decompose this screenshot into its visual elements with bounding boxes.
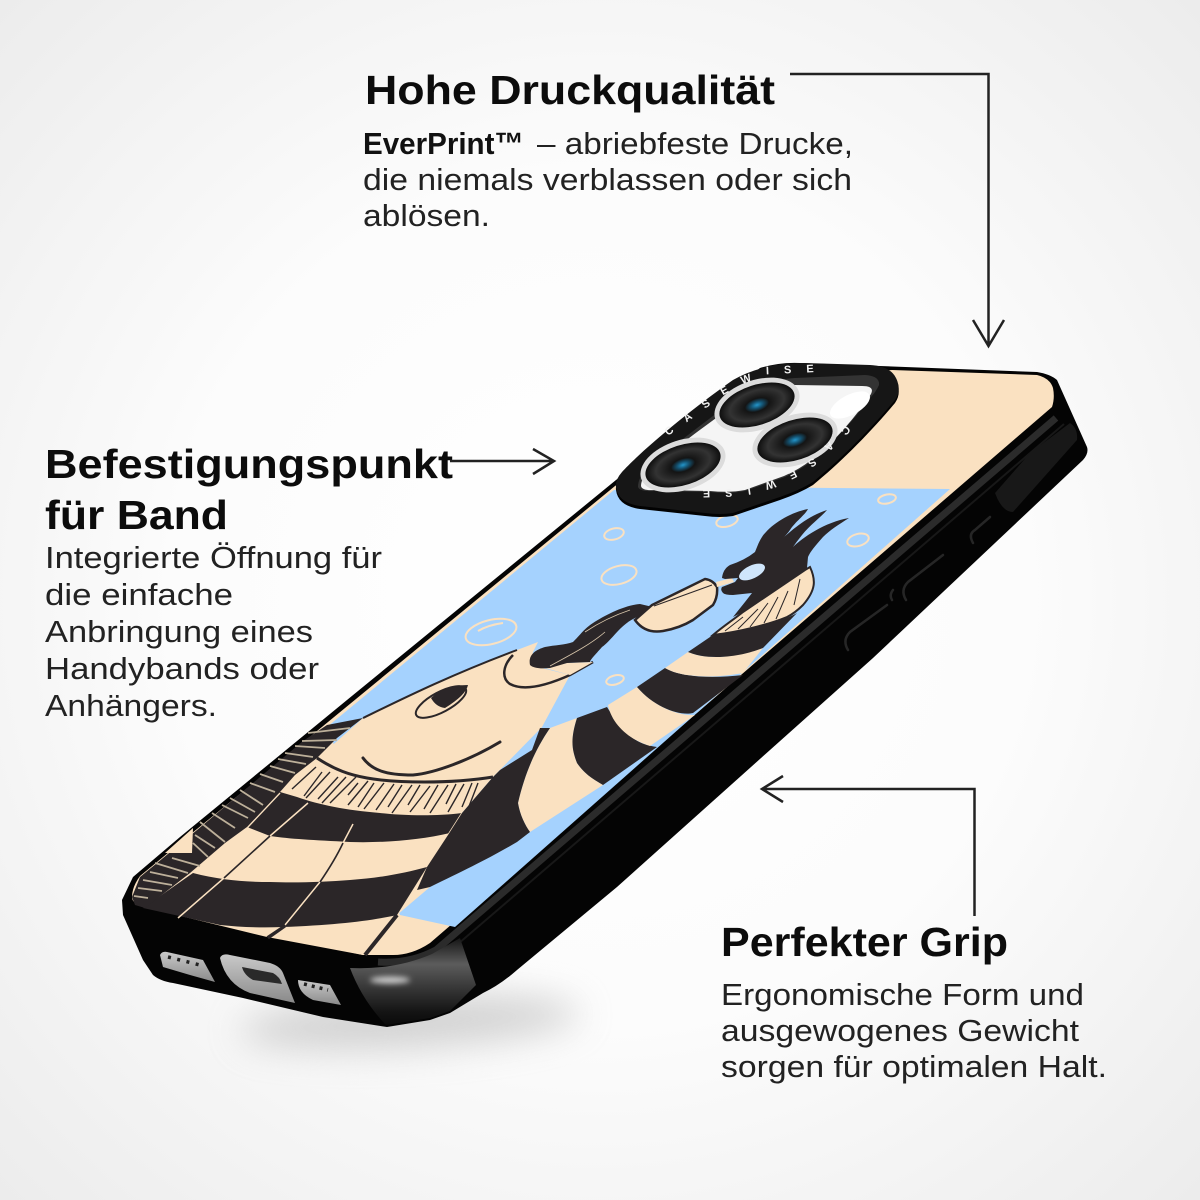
ring hole bbox=[737, 560, 767, 584]
camera frame underside bbox=[616, 366, 899, 517]
case body bbox=[122, 363, 1088, 1027]
charging port bbox=[220, 954, 295, 1003]
description: die einfache bbox=[45, 577, 233, 612]
fish smile bbox=[363, 742, 500, 775]
jaw tip bbox=[545, 662, 593, 675]
fringe hatching bbox=[292, 767, 478, 813]
description: EverPrint™ bbox=[363, 126, 524, 161]
flash bbox=[826, 386, 874, 424]
fish lip bbox=[504, 655, 593, 687]
lens top bbox=[707, 368, 807, 442]
fish body bbox=[148, 642, 570, 955]
side buttons bbox=[845, 517, 990, 650]
body seams bbox=[178, 793, 462, 955]
camera bump bbox=[616, 363, 899, 517]
heading bbox=[45, 441, 453, 538]
strap lug bbox=[995, 423, 1077, 512]
brush ferrule bbox=[635, 579, 717, 632]
left speaker bbox=[160, 952, 215, 982]
arrow: strap attachment bbox=[450, 449, 554, 474]
description: ablösen. bbox=[363, 198, 490, 233]
tail hatched fin bbox=[132, 718, 363, 908]
arm cream stripe lowest bbox=[518, 718, 603, 832]
body stripe lower bbox=[143, 867, 427, 927]
camera brand text top: CASEWISE bbox=[666, 364, 814, 434]
arrow: grip bbox=[762, 776, 974, 916]
side rim highlight bbox=[378, 418, 1056, 962]
heading: Befestigungspunkt bbox=[45, 441, 453, 487]
lens right bbox=[745, 403, 845, 477]
bubbles bbox=[463, 493, 897, 687]
heading: Perfekter Grip bbox=[721, 919, 1008, 965]
printed back: blue water bbox=[327, 487, 950, 927]
description: Ergonomische Form und bbox=[721, 977, 1084, 1012]
arm dark stripe lowest bbox=[572, 707, 657, 785]
description: die niemals verblassen oder sich bbox=[363, 162, 852, 197]
brush stick bbox=[716, 578, 734, 587]
description: Integrierte Öffnung für bbox=[45, 540, 382, 575]
dark wedge bbox=[417, 728, 550, 890]
description bbox=[363, 126, 853, 233]
fish bbox=[132, 578, 734, 955]
description: sorgen für optimalen Halt. bbox=[721, 1049, 1107, 1084]
description: Handybands oder bbox=[45, 651, 319, 686]
arm dark stripe bbox=[637, 668, 743, 714]
arm cream stripe upper bbox=[665, 648, 763, 676]
callout: grip bbox=[721, 919, 1107, 1084]
fish head outline bbox=[363, 650, 517, 718]
gill line bbox=[317, 758, 493, 782]
bottom corner sheen bbox=[350, 938, 476, 1025]
right speaker bbox=[298, 980, 341, 1005]
arm dark stripe upper bbox=[688, 613, 797, 657]
arrow: print quality bbox=[790, 74, 1004, 346]
callout: strap attachment bbox=[45, 441, 453, 723]
description: ausgewogenes Gewicht bbox=[721, 1013, 1079, 1048]
description: Anbringung eines bbox=[45, 614, 313, 649]
description: – abriebfeste Drucke, bbox=[537, 126, 853, 161]
callout: print quality bbox=[363, 67, 853, 233]
heading: für Band bbox=[45, 492, 228, 538]
striped arm and hand bbox=[417, 509, 849, 890]
cuff bbox=[713, 567, 814, 635]
camera inner recess bbox=[638, 375, 879, 493]
hand bbox=[721, 509, 849, 617]
fish eye bbox=[412, 680, 470, 724]
body stripe upper bbox=[247, 792, 462, 842]
camera frame bbox=[616, 363, 899, 514]
camera glass bbox=[641, 385, 872, 492]
arm cream stripe bbox=[608, 687, 695, 746]
phone drop shadow bbox=[239, 987, 581, 1057]
phone case illustration bbox=[122, 362, 1088, 1027]
camera brand text bottom: CASEWISE bbox=[703, 426, 850, 498]
printed back: cream base bbox=[132, 370, 1054, 955]
lens left bbox=[633, 428, 733, 502]
description: Anhängers. bbox=[45, 688, 217, 723]
heading: Hohe Druckqualität bbox=[365, 67, 775, 113]
description bbox=[45, 540, 382, 723]
description bbox=[721, 977, 1107, 1084]
brush tip bbox=[530, 604, 657, 668]
